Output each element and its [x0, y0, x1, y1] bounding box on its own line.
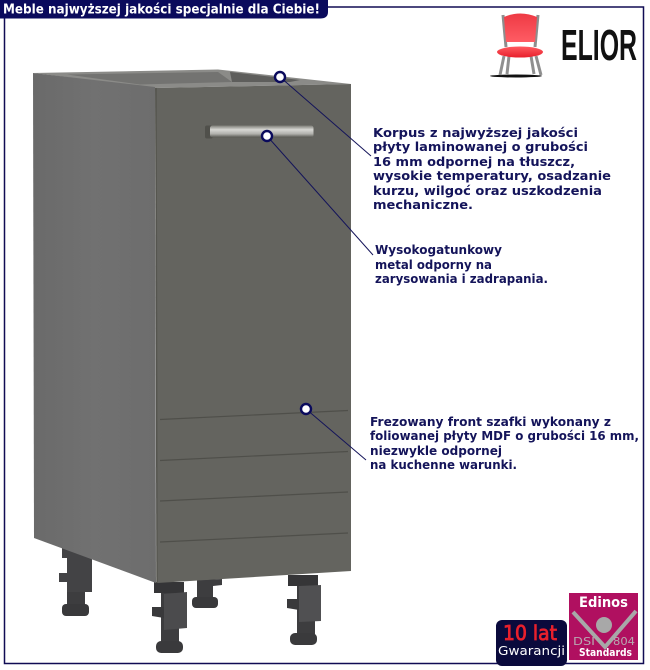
badge: 10 year warranty	[496, 620, 567, 666]
icon: red chair	[490, 14, 543, 78]
badge: Edinos standards: DSI	[573, 635, 595, 648]
callout leader lines	[267, 77, 373, 460]
text: door front description: foliowanej płyty MDF o grubości 16 mm,	[370, 428, 639, 443]
text: handle description: metal odporny na	[375, 257, 492, 272]
text: cabinet body description: płyty laminowanej o grubości	[373, 139, 588, 154]
badge: 10 year warranty: 10 lat	[503, 621, 557, 645]
rear centre leg	[192, 579, 222, 608]
title banner: Meble najwyższej jakości specjalnie dla Ciebie!	[3, 2, 320, 18]
marker: cabinet body	[275, 72, 285, 82]
cabinet legs	[59, 548, 321, 653]
door handle	[205, 126, 314, 138]
marker: handle	[262, 131, 272, 141]
text: handle description: zarysowania i zadrapania.	[375, 271, 548, 286]
text: door front description	[370, 414, 639, 472]
badge: 10 year warranty: Gwarancji	[498, 644, 565, 658]
text: handle description: Wysokogatunkowy	[375, 242, 502, 257]
badge: Edinos standards: 804	[613, 635, 635, 648]
text: door front description: Frezowany front szafki wykonany z	[370, 414, 611, 429]
text: door front description: na kuchenne warunki.	[370, 457, 517, 472]
text: cabinet body description	[373, 125, 611, 212]
text: cabinet body description: wysokie temperatury, osadzanie	[373, 168, 611, 183]
cabinet top	[33, 70, 351, 88]
text: cabinet body description: 16 mm odpornej na tłuszcz,	[373, 154, 575, 169]
text: cabinet body description: Korpus z najwyższej jakości	[373, 125, 578, 140]
front right leg	[287, 575, 321, 645]
text: door front description: niezwykle odpornej	[370, 443, 502, 458]
marker: door front	[301, 404, 311, 414]
front left leg	[152, 582, 187, 653]
cabinet front door	[155, 84, 351, 583]
cabinet illustration	[33, 70, 351, 583]
badge: Edinos standards	[569, 593, 638, 660]
badge: Edinos standards: Standards	[579, 646, 632, 659]
rear left leg	[59, 548, 92, 616]
text: cabinet body description: mechaniczne.	[373, 197, 473, 212]
logo: Elior	[490, 14, 637, 78]
front grooves	[160, 410, 348, 542]
cabinet side panel	[33, 73, 156, 583]
text: cabinet body description: kurzu, wilgoć oraz uszkodzenia	[373, 183, 602, 198]
badge: Edinos standards: Edinos	[579, 595, 628, 611]
text: handle description	[375, 242, 548, 286]
